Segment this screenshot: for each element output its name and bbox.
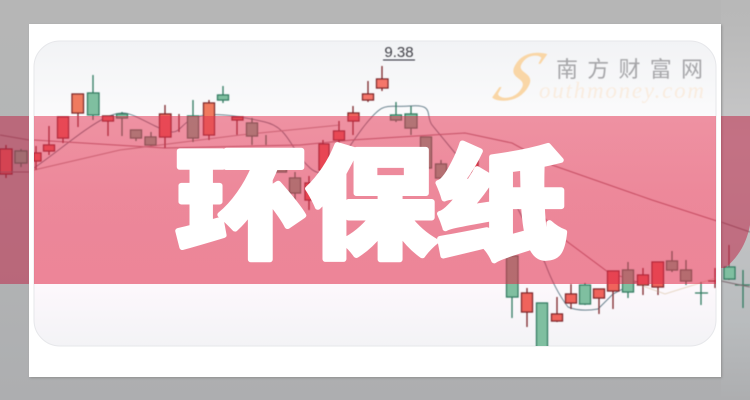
background right side (721, 0, 750, 400)
title: 环保纸 (176, 138, 566, 274)
moving average lines (34, 106, 720, 310)
pink band: left side (0, 116, 29, 284)
value label: 9.38 (384, 44, 414, 61)
red candles (34, 66, 664, 327)
inner chart panel (34, 41, 716, 346)
watermark logo (481, 37, 704, 116)
candlestick chart (34, 66, 720, 348)
pink band: right side (721, 116, 750, 268)
watermark logo: outhmoney.com (539, 78, 704, 103)
pink band: centre (34, 116, 716, 284)
watermark logo: S (481, 37, 558, 116)
green candles (88, 75, 716, 348)
off-card candlesticks (0, 135, 750, 308)
watermark logo: 南方财富网 (556, 57, 703, 82)
